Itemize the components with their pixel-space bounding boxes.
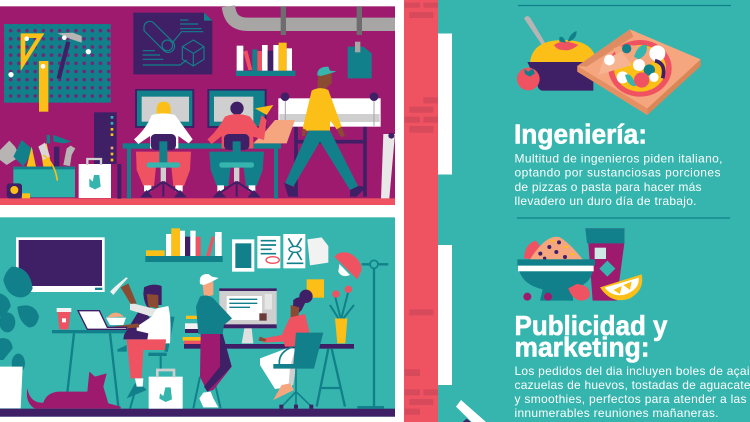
heading: Publicidad y marketing <box>514 310 668 362</box>
left desk <box>52 330 129 407</box>
flower vase <box>330 286 354 343</box>
standing man <box>196 274 232 407</box>
food bowl <box>106 313 126 325</box>
chair left <box>130 317 173 409</box>
shelf with books <box>145 228 223 262</box>
purple floor <box>0 409 395 417</box>
text block: engineering <box>514 152 722 208</box>
rolled paper <box>381 133 395 198</box>
text block: marketing: innumerables reuniones mañaneras. <box>514 406 718 420</box>
heading: Ingeniería: Ingeniería: <box>514 118 647 150</box>
text block: engineering: Multitud de ingenieros piden italiano, <box>514 152 722 166</box>
person in coral with pizza <box>207 102 273 197</box>
desk <box>123 143 281 199</box>
icon: pasta pot and pizza box <box>517 16 701 115</box>
laptop and paper <box>253 120 295 143</box>
bookshelf <box>236 43 295 76</box>
teal office chair <box>273 333 323 409</box>
text block: engineering: llevadero un duro día de trabajo. <box>514 194 696 208</box>
ceiling pipe <box>228 6 395 35</box>
wall screen <box>16 237 105 292</box>
clipboard <box>348 42 372 78</box>
coral floor <box>0 198 395 205</box>
panel: engineering office illustration <box>0 6 395 205</box>
right desk <box>184 344 354 408</box>
delivery bag <box>149 370 183 409</box>
dog <box>27 372 121 409</box>
blueprint poster <box>133 13 212 74</box>
text block: marketing: cazuelas de huevos, tostadas de aguacate <box>514 378 750 392</box>
floor lamp <box>334 252 388 409</box>
pegboard with tools <box>4 24 111 112</box>
man eating with spoon <box>107 277 171 398</box>
walking man <box>284 67 367 197</box>
panel: advertising and marketing office illustration <box>0 217 395 417</box>
laptop <box>78 311 127 329</box>
drink cup <box>57 308 71 329</box>
stacked books <box>183 316 201 344</box>
text block: marketing: y smoothies, perfectos para atender a las <box>514 392 746 406</box>
server tower <box>94 112 121 199</box>
panel: teal text column <box>438 0 750 422</box>
heading: Publicidad y marketing: marketing: <box>514 332 650 362</box>
text block: engineering: optando por sustanciosas porciones <box>514 166 720 180</box>
text block: marketing: Los pedidos del dia incluyen boles de açai <box>514 364 750 378</box>
text block: marketing <box>514 364 750 420</box>
white diagonal pipe <box>456 400 486 422</box>
wall pictures and notes <box>232 234 328 298</box>
potted plant <box>0 267 39 408</box>
monitors <box>135 89 267 128</box>
delivery bag <box>79 159 111 198</box>
drawing board <box>278 92 381 197</box>
desktop computer <box>219 288 277 343</box>
coral brick column <box>404 0 438 422</box>
toolbox with tools <box>0 135 75 198</box>
icon: breakfast bowl and drink <box>517 228 642 301</box>
heading: Publicidad y marketing: Publicidad y <box>514 310 668 341</box>
woman at computer <box>258 290 313 400</box>
person in white <box>134 102 193 197</box>
text block: engineering: de pizzas o pasta para hacer más <box>514 180 702 194</box>
